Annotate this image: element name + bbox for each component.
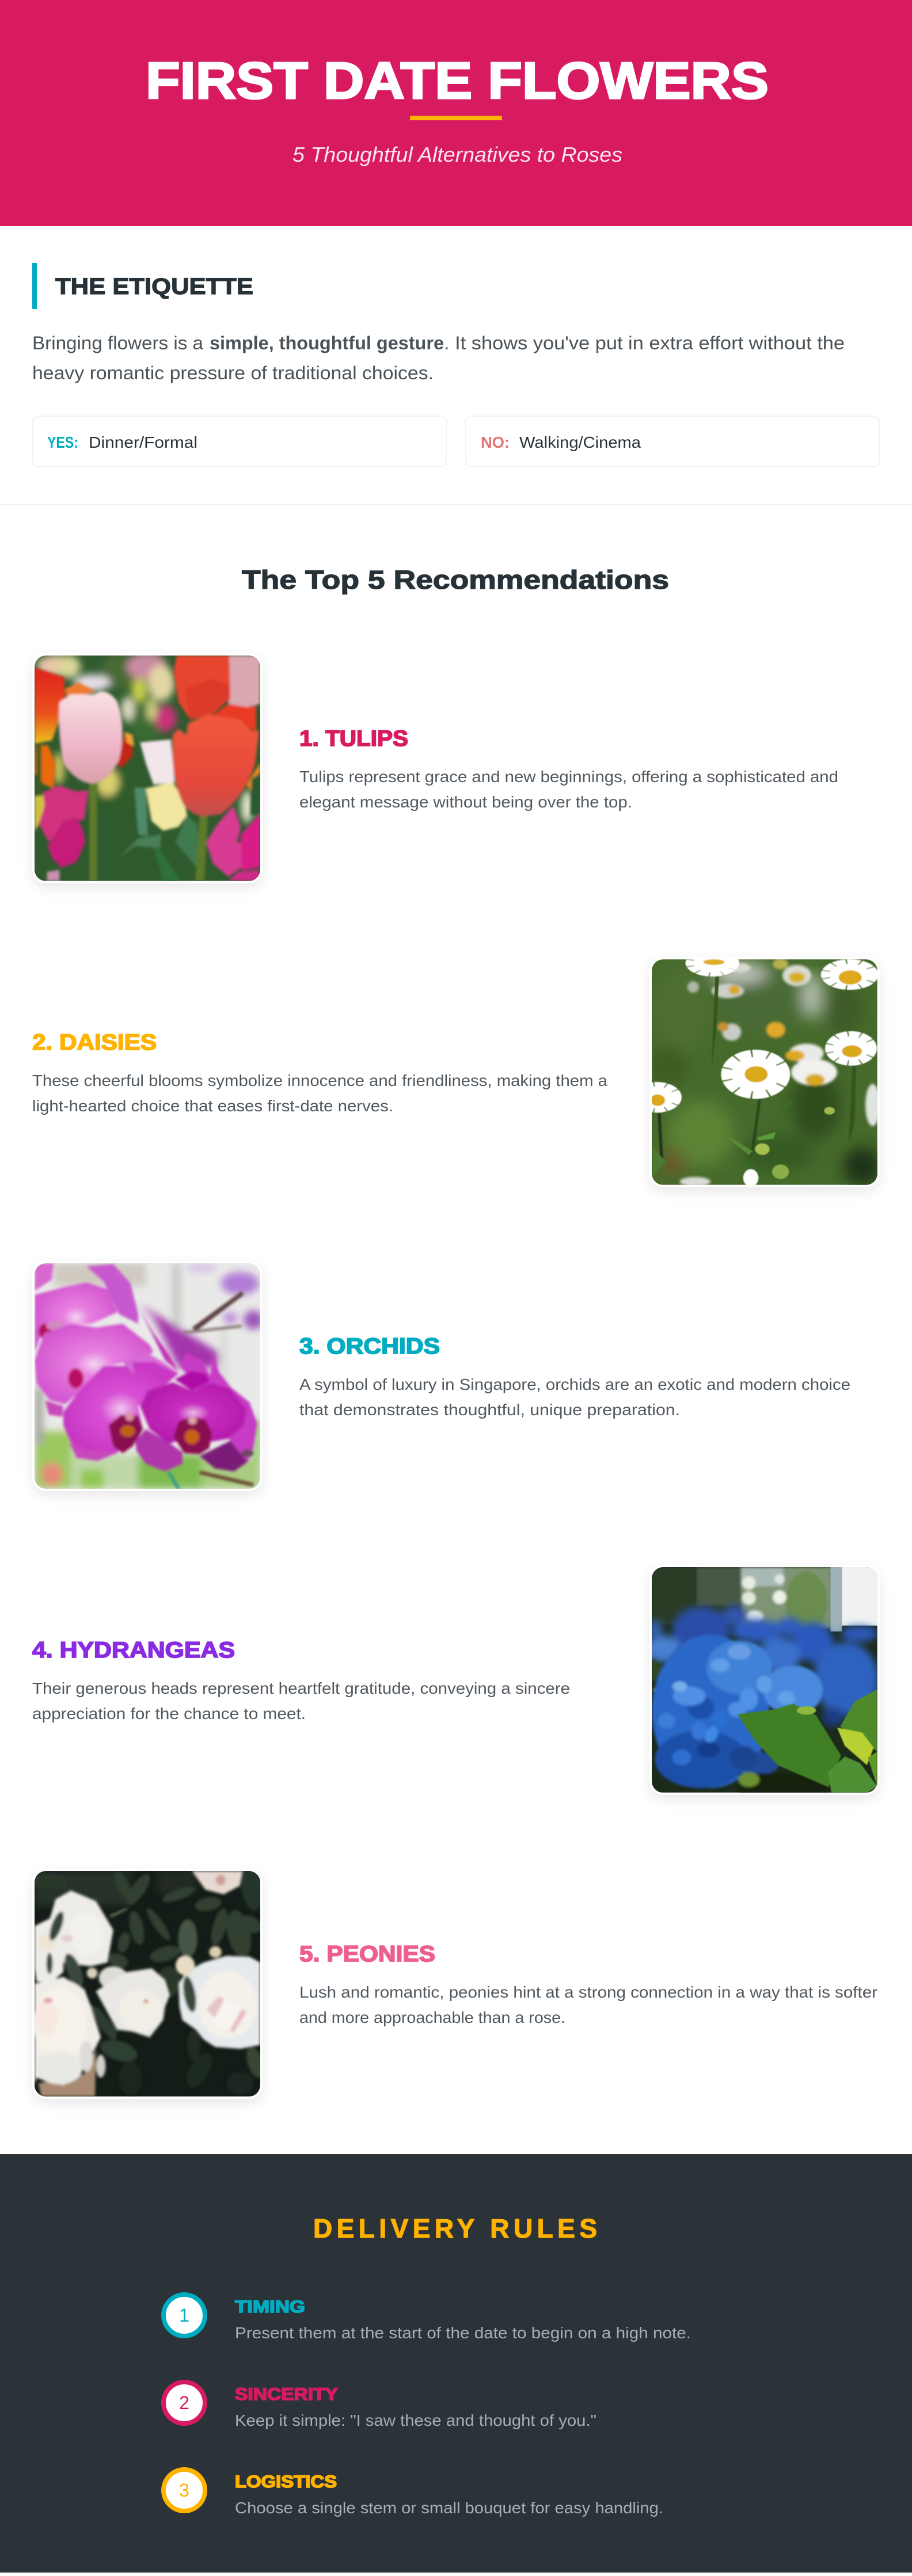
row 5: peonies <box>32 1859 877 2099</box>
etiquette heading: THE ETIQUETTE <box>55 274 253 299</box>
logistics text: Choose a single stem or small bouquet for easy handling. <box>235 2499 663 2517</box>
orchids text: that demonstrates thoughtful, unique preparation. <box>299 1401 680 1419</box>
peonies text: Lush and romantic, peonies hint at a strong connection in a way that is softer <box>299 1983 877 2001</box>
etiquette paragraph: simple, thoughtful gesture <box>210 333 444 353</box>
photo: hydrangeas <box>646 1565 880 1795</box>
card: yes: Dinner/Formal <box>89 433 197 451</box>
tulips text: Tulips represent grace and new beginnings, offering a sophisticated and <box>299 768 838 786</box>
icon: number 3 badge <box>164 2470 205 2511</box>
sincerity text: SINCERITY <box>235 2385 338 2404</box>
card: no: Walking/Cinema <box>519 433 641 451</box>
logistics text: LOGISTICS <box>235 2472 337 2491</box>
header banner <box>0 0 912 226</box>
sincerity text <box>235 2385 596 2429</box>
panel: the etiquette <box>32 263 879 467</box>
etiquette paragraph: heavy romantic pressure of traditional choices. <box>32 363 434 383</box>
orchids text: 3. ORCHIDS <box>299 1334 440 1359</box>
timing text: Present them at the start of the date to begin on a high note. <box>235 2324 691 2342</box>
sincerity text: Keep it simple: "I saw these and thought of you." <box>235 2411 596 2429</box>
peonies text <box>299 1942 877 2026</box>
peonies text: and more approachable than a rose. <box>299 2009 565 2026</box>
hydrangeas text: appreciation for the chance to meet. <box>32 1705 306 1723</box>
daisies text: 2. DAISIES <box>32 1030 157 1055</box>
delivery heading: DELIVERY RULES <box>313 2213 597 2243</box>
recommendations heading: The Top 5 Recommendations <box>242 565 669 595</box>
daisies text: light-hearted choice that eases first-date nerves. <box>32 1097 393 1115</box>
row 2: daisies <box>32 952 881 1187</box>
orchids text <box>299 1334 850 1419</box>
orchids text: A symbol of luxury in Singapore, orchids are an exotic and modern choice <box>299 1375 850 1393</box>
hydrangeas text: Their generous heads represent heartfelt gratitude, conveying a sincere <box>32 1679 570 1697</box>
timing text: TIMING <box>235 2297 305 2316</box>
photo: tulips <box>32 652 263 883</box>
title: FIRST DATE FLOWERS <box>146 52 769 110</box>
daisies text <box>32 1030 607 1115</box>
card: no: NO: <box>481 433 510 451</box>
card: yes: YES: <box>47 433 78 451</box>
etiquette paragraph: . It shows you've put in extra effort without the <box>444 333 845 353</box>
photo: peonies <box>32 1859 268 2099</box>
etiquette paragraph <box>32 333 845 383</box>
card: no <box>466 416 879 467</box>
hydrangeas text <box>32 1638 570 1723</box>
row 1: tulips <box>32 652 838 883</box>
card: yes <box>33 416 446 467</box>
peonies text: 5. PEONIES <box>299 1942 435 1967</box>
timing text <box>235 2297 691 2342</box>
etiquette accent bar <box>32 263 37 309</box>
icon: number 3 badge: 3 <box>179 2480 189 2501</box>
rule: sincerity <box>164 2382 596 2429</box>
daisies text: These cheerful blooms symbolize innocence and friendliness, making them a <box>32 1072 607 1089</box>
tulips text: 1. TULIPS <box>299 726 408 751</box>
logistics text <box>235 2472 663 2517</box>
rule: logistics <box>164 2470 663 2517</box>
tulips text <box>299 726 838 811</box>
title accent bar <box>410 116 502 120</box>
tulips text: elegant message without being over the top. <box>299 793 632 811</box>
subtitle: 5 Thoughtful Alternatives to Roses <box>292 143 622 166</box>
photo: daisies <box>637 952 881 1187</box>
icon: number 2 badge <box>164 2382 205 2423</box>
panel: delivery rules <box>0 2154 912 2573</box>
rule: timing <box>164 2295 691 2342</box>
icon: number 1 badge <box>164 2295 205 2336</box>
icon: number 2 badge: 2 <box>179 2392 189 2413</box>
row 3: orchids <box>32 1261 850 1491</box>
photo: orchids <box>32 1261 263 1491</box>
icon: number 1 badge: 1 <box>179 2305 189 2326</box>
hydrangeas text: 4. HYDRANGEAS <box>32 1638 235 1663</box>
etiquette paragraph: Bringing flowers is a <box>32 333 203 353</box>
row 4: hydrangeas <box>32 1565 880 1795</box>
